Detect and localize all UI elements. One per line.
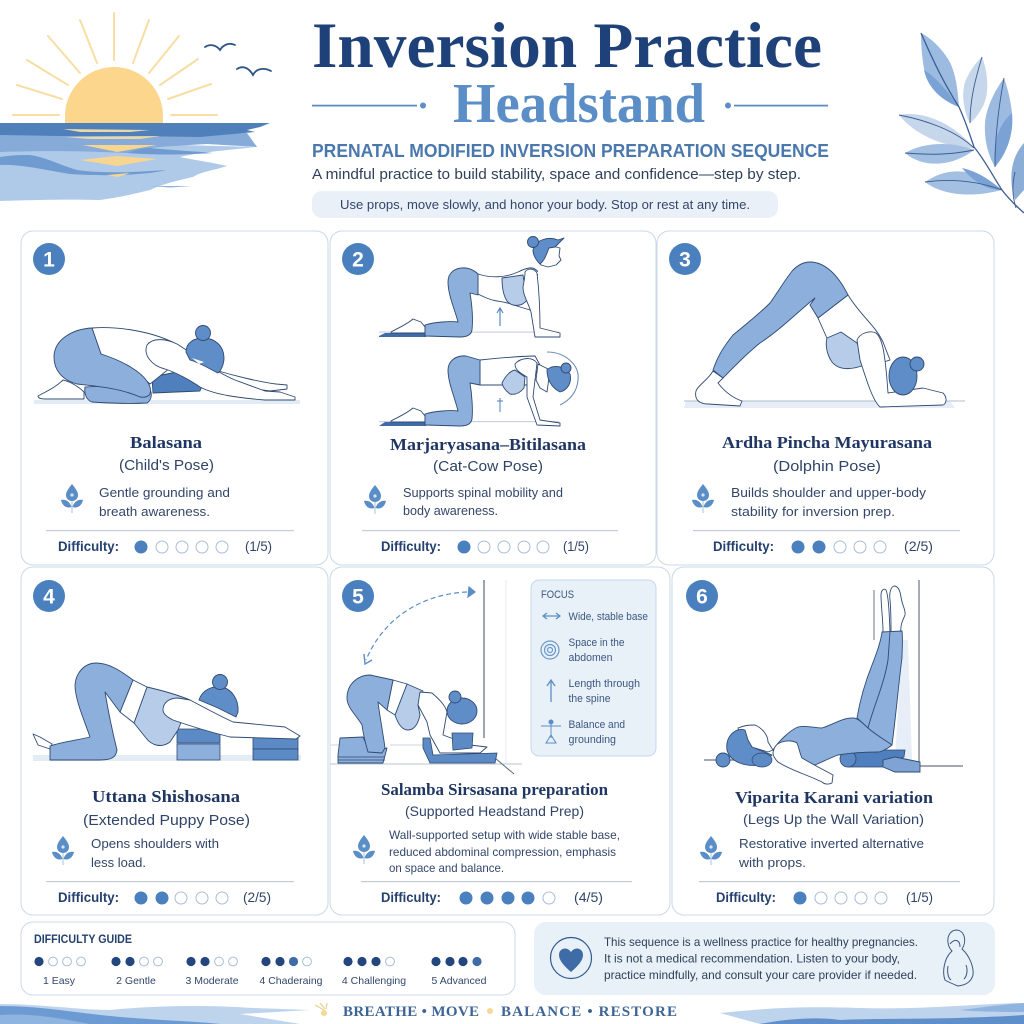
birds	[205, 44, 271, 75]
step number 6: 6	[696, 586, 708, 608]
icon: heart in circle	[550, 938, 592, 978]
footer sun accent left	[315, 1003, 327, 1016]
step number 2: 2	[352, 248, 364, 272]
panel: disclaimer	[534, 922, 995, 995]
pose illustration: child's pose	[34, 326, 300, 404]
difficulty rating 2/5: (2/5)	[243, 890, 271, 905]
safety note pill	[312, 191, 778, 218]
pose name: Ardha Pincha Mayurasana	[722, 433, 933, 452]
icon: pregnant figure outline	[944, 930, 973, 986]
step number 1: 1	[43, 248, 55, 272]
difficulty rating 1/5	[58, 539, 272, 554]
difficulty rating 4/5: (4/5)	[574, 890, 603, 905]
guide level: 2 Gentle: 2 Gentle	[116, 975, 156, 987]
focus panel: FOCUS	[541, 589, 574, 601]
English name: (Supported Headstand Prep)	[405, 803, 584, 819]
difficulty rating 1/5: Difficulty:	[381, 539, 441, 554]
pose description: with props.	[738, 855, 806, 870]
difficulty rating 1/5: (1/5)	[245, 539, 272, 554]
pose description: Builds shoulder and upper-body	[731, 485, 927, 500]
difficulty rating 4/5: Difficulty:	[381, 890, 441, 905]
icon: sprout	[364, 485, 386, 514]
guide level: 4 Chaderaing	[259, 957, 323, 987]
step number 5	[342, 580, 374, 612]
pose description: body awareness.	[403, 503, 498, 518]
footer wave right	[720, 1003, 1024, 1024]
difficulty rating 2/5	[58, 890, 271, 905]
difficulty rating 2/5	[713, 539, 933, 554]
step number 6	[686, 580, 718, 612]
pose name: Viparita Karani variation	[735, 788, 934, 807]
guide level: 4 Challenging	[342, 957, 406, 987]
focus panel: Space in the	[568, 637, 624, 649]
step number 4	[33, 580, 65, 612]
difficulty rating 1/5: (1/5)	[563, 539, 589, 554]
footer tagline: first half: BREATHE • MOVE	[343, 1004, 479, 1020]
icon: balance figure	[541, 720, 561, 743]
step number 3	[669, 243, 701, 275]
panel: step 2 Marjaryasana-Bitilasana	[330, 231, 656, 565]
panel: difficulty guide	[21, 922, 515, 995]
wall and floor lines	[330, 580, 522, 774]
difficulty rating 2/5: (2/5)	[904, 539, 933, 554]
pose illustration: dolphin pose	[684, 262, 965, 408]
step number 2	[342, 243, 374, 275]
pose description: Wall-supported setup with wide stable base,	[389, 828, 620, 842]
step number 4: 4	[43, 586, 55, 608]
English name: (Legs Up the Wall Variation)	[743, 811, 924, 827]
pose description: stability for inversion prep.	[731, 504, 895, 519]
focus panel: the spine	[568, 693, 610, 705]
focus panel: grounding	[568, 734, 616, 746]
guide level: 3 Moderate: 3 Moderate	[185, 975, 239, 987]
difficulty rating 2/5: Difficulty:	[713, 539, 774, 554]
headstand flourish lines	[312, 102, 828, 108]
difficulty rating 1/5: (1/5)	[906, 890, 933, 905]
icon: sprout	[700, 836, 722, 865]
difficulty rating 1/5	[716, 890, 933, 905]
icon: sprout	[692, 484, 714, 513]
pose illustration: cat pose	[379, 352, 578, 426]
panel: step 4 Uttana Shishosana	[21, 567, 328, 915]
title: Inversion Practice	[312, 10, 822, 82]
icon: sprout	[61, 484, 83, 513]
guide level: 1 Easy: 1 Easy	[43, 975, 76, 987]
icon: concentric circles	[541, 641, 559, 659]
disclaimer text: This sequence is a wellness practice for healthy pregnancies.	[604, 935, 918, 949]
section heading: PRENATAL MODIFIED INVERSION PREPARATION SEQUENCE	[312, 141, 829, 161]
pose description: Supports spinal mobility and	[403, 485, 563, 500]
guide level: 5 Advanced: 5 Advanced	[432, 975, 487, 987]
pose name: Marjaryasana–Bitilasana	[390, 435, 587, 454]
focus panel: Length through	[568, 678, 640, 690]
guide heading: DIFFICULTY GUIDE	[34, 934, 132, 946]
guide level: 2 Gentle	[111, 957, 162, 987]
pose illustration: cow pose	[379, 236, 564, 337]
focus panel: abdomen	[568, 652, 612, 664]
step number 5: 5	[352, 586, 364, 608]
guide level: 4 Chaderaing: 4 Chaderaing	[259, 975, 323, 987]
disclaimer text: It is not a medical recommendation. Listen to your body,	[604, 952, 900, 966]
English name: (Extended Puppy Pose)	[83, 812, 250, 829]
pose description: reduced abdominal compression, emphasis	[389, 845, 616, 859]
guide level: 3 Moderate	[185, 957, 239, 987]
difficulty rating 4/5	[381, 890, 603, 905]
pose description: Restorative inverted alternative	[739, 836, 924, 851]
footer wave left	[0, 1004, 310, 1024]
pose description: on space and balance.	[389, 861, 504, 875]
intro line: A mindful practice to build stability, space and confidence—step by step.	[312, 166, 801, 183]
pose description: less load.	[91, 855, 146, 870]
difficulty rating 1/5: Difficulty:	[716, 890, 776, 905]
safety note pill: Use props, move slowly, and honor your body. Stop or rest at any time.	[340, 197, 750, 212]
pose description: Gentle grounding and	[99, 485, 230, 500]
pose illustration: legs up the wall	[704, 580, 963, 784]
icon: sprout	[52, 836, 74, 865]
pose description: breath awareness.	[99, 504, 210, 519]
step number 3: 3	[679, 248, 691, 272]
pose name: Balasana	[130, 433, 203, 452]
icon: sprout	[353, 835, 375, 864]
pose description: Opens shoulders with	[91, 836, 219, 851]
focus panel: Balance and	[568, 719, 625, 731]
pose name: Salamba Sirsasana preparation	[381, 780, 609, 799]
sunrise over the sea illustration	[0, 13, 270, 201]
difficulty rating 2/5: Difficulty:	[58, 890, 119, 905]
focus panel: Wide, stable base	[568, 611, 648, 623]
footer sun accent middle	[487, 1008, 493, 1014]
pose name: Uttana Shishosana	[92, 787, 241, 806]
step number 1	[33, 243, 65, 275]
guide level: 4 Challenging: 4 Challenging	[342, 975, 406, 987]
English name: (Child's Pose)	[119, 457, 214, 474]
disclaimer text: practice mindfully, and consult your care provider if needed.	[604, 968, 917, 982]
difficulty rating 1/5: Difficulty:	[58, 539, 119, 554]
pose illustration: extended puppy pose	[33, 663, 301, 761]
pose illustration: supported headstand prep	[338, 675, 497, 763]
icon: wide base arrow	[543, 613, 560, 619]
panel: step 1 Balasana	[21, 231, 328, 565]
guide level: 1 Easy	[34, 957, 85, 987]
English name: (Cat-Cow Pose)	[433, 458, 543, 475]
icon: up arrow	[547, 680, 555, 702]
footer tagline: second half: BALANCE • RESTORE	[501, 1004, 677, 1020]
arc arrow	[364, 587, 475, 664]
panel: step 6 Viparita Karani variation	[672, 567, 994, 915]
panel: step 5 Salamba Sirsasana preparation	[330, 567, 670, 915]
leafy branch	[899, 33, 1024, 213]
English name: (Dolphin Pose)	[773, 458, 881, 475]
focus panel	[531, 580, 656, 756]
subtitle: Headstand: Headstand	[453, 73, 705, 135]
panel: step 3 Ardha Pincha Mayurasana	[657, 231, 994, 565]
guide level: 5 Advanced	[431, 957, 487, 987]
difficulty rating 1/5	[381, 539, 589, 554]
